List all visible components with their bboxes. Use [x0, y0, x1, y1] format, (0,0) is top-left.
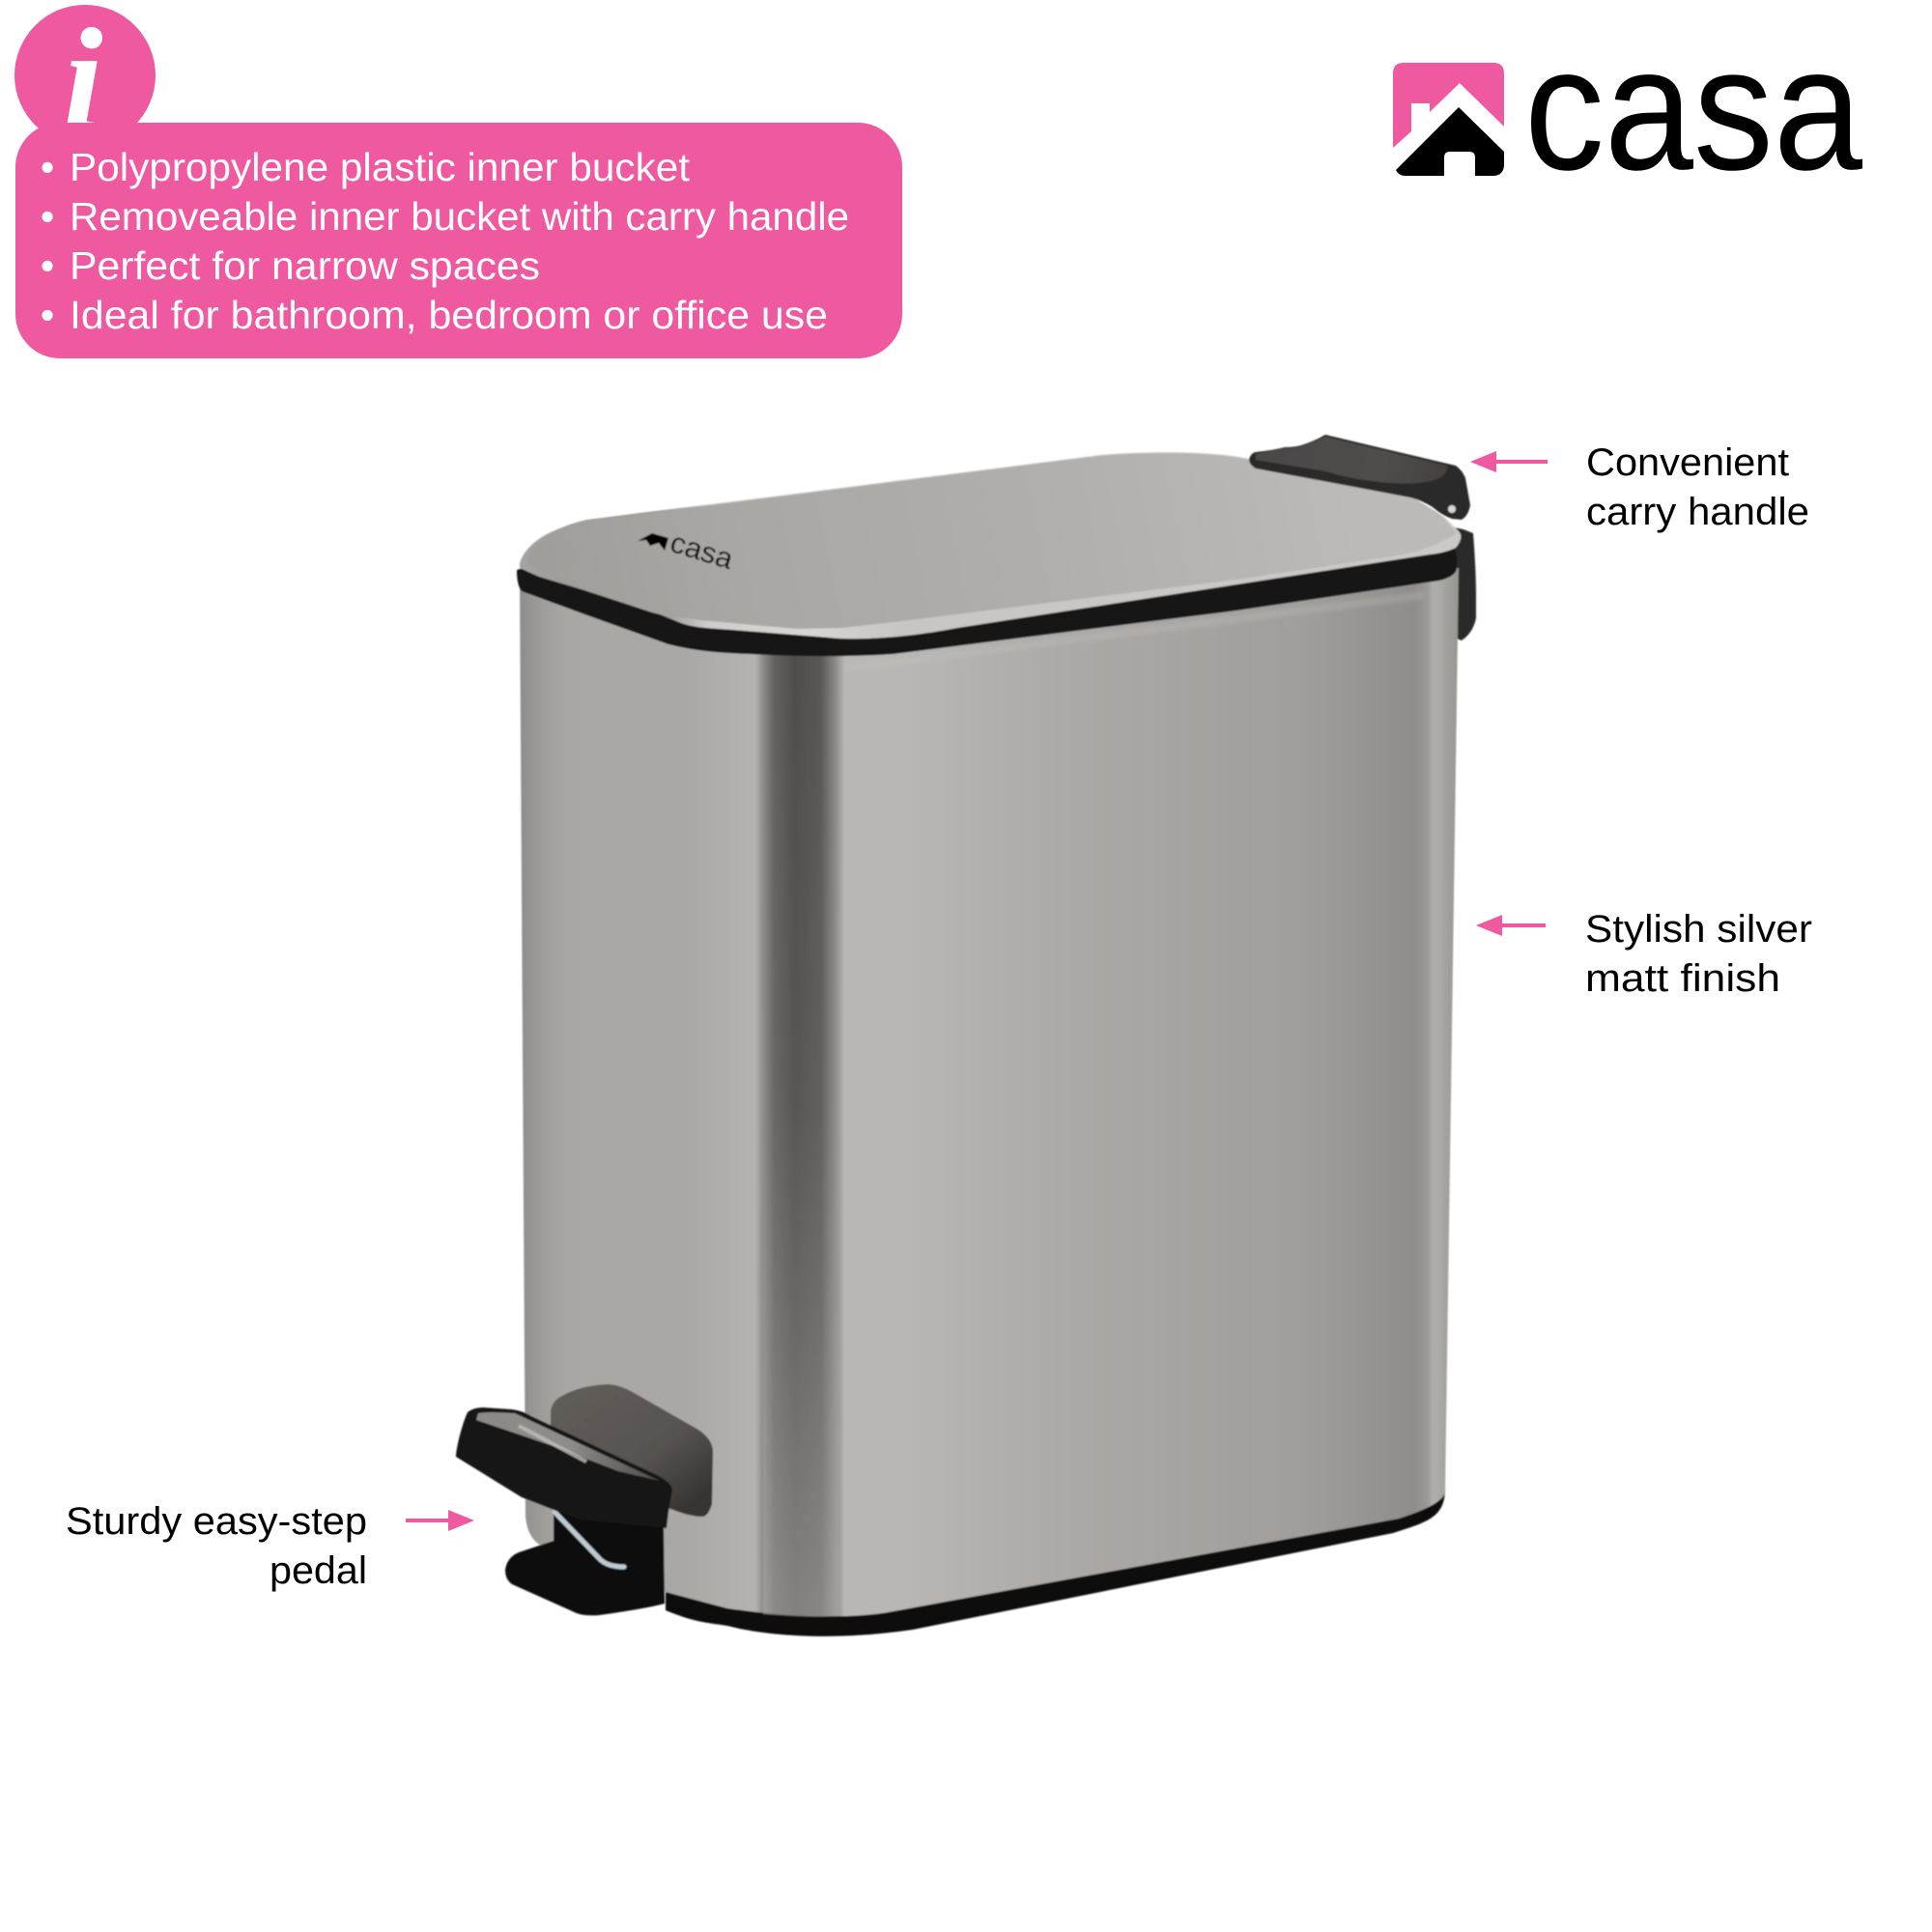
arrow: silver finish	[1476, 915, 1546, 936]
label: silver finish: Stylish silver	[1585, 908, 1812, 951]
feature 1: •	[41, 145, 54, 189]
logo icon: black house	[1396, 107, 1504, 176]
lid top surface	[526, 453, 1457, 629]
pedal upper housing	[551, 1384, 713, 1517]
feature 4: Ideal for bathroom, bedroom or office use	[70, 293, 828, 337]
bin body	[520, 568, 1459, 1616]
feature 2: •	[41, 194, 54, 239]
label: pedal: pedal	[270, 1549, 367, 1592]
info icon circle: i	[63, 0, 103, 159]
handle hinge pin	[1448, 505, 1456, 513]
label: pedal: Sturdy easy-step	[66, 1500, 367, 1543]
arrow: pedal	[406, 1510, 474, 1531]
feature 3: •	[41, 243, 54, 288]
bin rear hinge	[1454, 527, 1476, 640]
logo icon: pink roof square	[1393, 63, 1504, 148]
bin base gasket	[526, 1488, 1445, 1636]
pedal step	[456, 1407, 672, 1528]
handle top face	[1256, 437, 1447, 483]
arrow: carry handle	[1470, 451, 1548, 472]
pedal spring wire	[554, 1512, 624, 1567]
bin body lower fade	[763, 638, 838, 1617]
feature 1: Polypropylene plastic inner bucket	[70, 145, 691, 189]
label: carry handle	[1586, 441, 1809, 533]
pedal plate highlight	[519, 1426, 586, 1462]
lid rim	[520, 452, 1461, 639]
lid logo	[638, 526, 737, 576]
feature 3: Perfect for narrow spaces	[70, 243, 540, 288]
info icon circle	[14, 0, 156, 159]
label: pedal	[66, 1500, 367, 1592]
pedal step metal plate	[476, 1412, 660, 1481]
casa logo	[1393, 10, 1863, 207]
carry handle	[1249, 435, 1470, 520]
label: silver finish	[1585, 908, 1812, 1000]
panel: product features	[15, 123, 902, 358]
handle body	[1249, 435, 1470, 520]
label: silver finish: matt finish	[1585, 957, 1780, 1000]
feature 2: Removeable inner bucket with carry handle	[70, 194, 849, 239]
logo wordmark: casa	[1524, 10, 1863, 207]
label: carry handle: carry handle	[1586, 491, 1809, 533]
lid gasket	[517, 522, 1457, 656]
feature 4: •	[41, 293, 54, 337]
body top inner rim	[845, 595, 1424, 668]
silver pedal bin	[456, 435, 1476, 1636]
label: carry handle: Convenient	[1586, 441, 1789, 484]
lid logo: casa	[667, 526, 737, 576]
pedal foot base	[505, 1510, 665, 1615]
